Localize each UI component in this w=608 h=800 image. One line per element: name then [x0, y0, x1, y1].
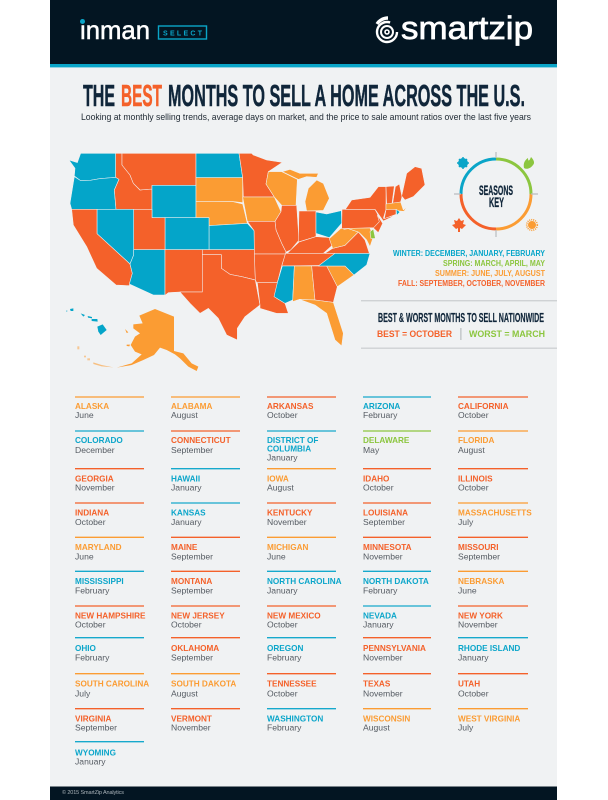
key heading [479, 182, 513, 210]
state: Virginia: September [75, 722, 117, 732]
state: Vermont: VERMONT [171, 714, 212, 723]
state: West Virginia: July [458, 722, 474, 732]
state: New Hampshire: October [75, 620, 106, 630]
season ring [454, 152, 538, 237]
state: Hawaii: HAWAII [171, 474, 200, 483]
state: West Virginia [458, 709, 528, 732]
best and worst months panel [361, 300, 557, 349]
state: Arizona [363, 397, 431, 420]
seasons key: SEASONS [479, 182, 513, 198]
state: Maine: September [171, 552, 213, 562]
state: New York [458, 606, 528, 630]
state: North Dakota: NORTH DAKOTA [363, 577, 429, 586]
state: Pennsylvania: November [363, 652, 403, 662]
state: Maryland [75, 537, 144, 562]
state: Vermont: November [171, 722, 211, 732]
state: Wisconsin: August [363, 722, 390, 732]
state: Oklahoma: OKLAHOMA [171, 644, 219, 653]
state: Florida: August [458, 445, 485, 455]
state: Wisconsin: WISCONSIN [363, 714, 410, 723]
state list [75, 397, 532, 767]
state: Arkansas: October [267, 410, 298, 420]
header band [50, 0, 557, 67]
state: Oregon: February [267, 652, 302, 662]
state: Florida: FLORIDA [458, 436, 494, 445]
state: Michigan [267, 537, 336, 562]
map of the United States [69, 153, 425, 346]
state: Connecticut [171, 431, 240, 455]
state: Kansas [171, 503, 240, 527]
state: Iowa: IOWA [267, 474, 289, 483]
state: Arizona: ARIZONA [363, 402, 400, 411]
season month lists: WINTER: DECEMBER, JANUARY, FEBRUARY [393, 249, 546, 258]
state: North Carolina: January [267, 586, 298, 596]
state: Pennsylvania [363, 638, 431, 662]
state: California [458, 397, 528, 420]
state: Ohio [75, 638, 144, 662]
state: Ohio: OHIO [75, 644, 97, 653]
state: New Jersey: October [171, 620, 202, 630]
season month lists [393, 249, 546, 288]
season month lists: FALL: SEPTEMBER, OCTOBER, NOVEMBER [398, 279, 545, 288]
best and worst months panel: BEST = OCTOBER [377, 329, 452, 340]
state: Georgia: November [75, 483, 115, 493]
season month lists: SUMMER: JUNE, JULY, AUGUST [435, 269, 545, 278]
state: Alaska [75, 397, 144, 420]
state: South Carolina: SOUTH CAROLINA [75, 680, 149, 689]
state: Utah: October [458, 688, 489, 698]
state: Hawaii: January [171, 483, 202, 493]
state: Idaho: IDAHO [363, 474, 390, 483]
state: Idaho: October [363, 483, 394, 493]
state: Nevada [363, 606, 431, 630]
state: Massachusetts: July [458, 517, 474, 527]
state: South Carolina: July [75, 688, 91, 698]
best and worst months panel: WORST = MARCH [469, 329, 545, 340]
state: North Carolina: NORTH CAROLINA [267, 577, 342, 586]
seasons key [452, 152, 538, 237]
state: Florida [458, 431, 528, 455]
state: New Jersey [171, 606, 240, 630]
state: West Virginia: WEST VIRGINIA [458, 714, 520, 723]
footer: © 2015 SmartZip Analytics [62, 789, 124, 796]
state: Michigan: June [267, 552, 286, 562]
season month lists: SPRING: MARCH, APRIL, MAY [443, 259, 546, 268]
state: Illinois: ILLINOIS [458, 474, 493, 483]
state: Arkansas [267, 397, 336, 420]
state: Maine [171, 537, 240, 562]
state: Indiana [75, 503, 144, 527]
state: Indiana: October [75, 517, 106, 527]
state: Rhode Island: January [458, 652, 489, 662]
state: Wyoming: WYOMING [75, 749, 116, 758]
state: California: CALIFORNIA [458, 402, 509, 411]
state: Washington: WASHINGTON [267, 714, 323, 723]
state: Virginia [75, 709, 144, 732]
state: Louisiana: LOUISIANA [363, 508, 408, 517]
state: Oklahoma: September [171, 652, 213, 662]
logo: inman select: inman [80, 15, 150, 45]
state: Montana: MONTANA [171, 577, 212, 586]
state: Delaware: DELAWARE [363, 436, 410, 445]
state: Tennessee: October [267, 688, 298, 698]
state: Missouri: September [458, 552, 500, 562]
state: Kentucky: KENTUCKY [267, 508, 313, 517]
state: Rhode Island [458, 638, 528, 662]
state: Maryland: June [75, 552, 94, 562]
key heading: KEY [489, 194, 504, 210]
state: Texas: November [363, 688, 403, 698]
state: Georgia [75, 469, 144, 493]
logo: inman select [80, 15, 206, 45]
state: Missouri: MISSOURI [458, 543, 498, 552]
icon: snowflake [457, 157, 469, 169]
state: Washington: February [267, 722, 302, 732]
state: Illinois: October [458, 483, 489, 493]
state: Utah [458, 674, 528, 698]
state: Connecticut: CONNECTICUT [171, 436, 231, 445]
icon: spring leaf [524, 157, 534, 169]
state: Massachusetts: MASSACHUSETTS [458, 508, 532, 517]
icon: sun [527, 220, 537, 230]
state: South Dakota [171, 674, 240, 698]
state: Illinois [458, 469, 528, 493]
title [83, 78, 525, 113]
state: New Mexico: October [267, 620, 298, 630]
state: District of Columbia: COLUMBIA [267, 445, 311, 454]
state: Kentucky: November [267, 517, 307, 527]
logo: inman select: SELECT [163, 30, 203, 37]
state: Tennessee [267, 674, 336, 698]
state: Idaho [363, 469, 431, 493]
state: Tennessee: TENNESSEE [267, 680, 317, 689]
state: Hawaii [171, 469, 240, 493]
state: Colorado: COLORADO [75, 436, 123, 445]
map inset: Alaska and Hawaii [66, 308, 198, 371]
state: Mississippi: February [75, 586, 110, 596]
title: THE [83, 78, 115, 113]
state: New Mexico [267, 606, 336, 630]
state: Alaska: ALASKA [75, 402, 109, 411]
state: Minnesota: MINNESOTA [363, 543, 412, 552]
state: Alabama: August [171, 410, 198, 420]
state: California: October [458, 410, 489, 420]
state: Arizona: February [363, 410, 398, 420]
state: Massachusetts [458, 503, 532, 527]
state: Missouri [458, 537, 528, 562]
state: District of Columbia [267, 431, 336, 462]
state: Colorado [75, 431, 144, 455]
state: Delaware: May [363, 445, 380, 455]
state: Nevada: NEVADA [363, 611, 397, 620]
state: North Carolina [267, 571, 342, 596]
state: South Dakota: August [171, 688, 198, 698]
state: New Jersey: NEW JERSEY [171, 611, 225, 620]
state: North Dakota: February [363, 586, 398, 596]
state: New Mexico: NEW MEXICO [267, 611, 321, 620]
state: Michigan: MICHIGAN [267, 543, 308, 552]
state: Ohio: February [75, 652, 110, 662]
state: Mississippi [75, 571, 144, 596]
state: District of Columbia: January [267, 452, 298, 462]
state: Montana: September [171, 586, 213, 596]
state: Oklahoma [171, 638, 240, 662]
state: Texas: TEXAS [363, 680, 391, 689]
state: Iowa [267, 469, 336, 493]
state: Texas [363, 674, 431, 698]
title: BEST [121, 78, 162, 113]
state: New Hampshire [75, 606, 146, 630]
state: Georgia: GEORGIA [75, 474, 114, 483]
state: Minnesota [363, 537, 431, 562]
state: Alaska: June [75, 410, 94, 420]
state: New York: November [458, 620, 498, 630]
state: Nebraska: NEBRASKA [458, 577, 504, 586]
state: New York: NEW YORK [458, 611, 503, 620]
state: New Hampshire: NEW HAMPSHIRE [75, 611, 146, 620]
state: Wyoming [75, 742, 144, 767]
state: Oregon: OREGON [267, 644, 303, 653]
state: Virginia: VIRGINIA [75, 714, 111, 723]
state: District of Columbia: DISTRICT OF [267, 436, 318, 445]
icon: maple leaf [452, 218, 466, 232]
state: Wyoming: January [75, 757, 106, 767]
state: Montana [171, 571, 240, 596]
state: Nebraska: June [458, 586, 477, 596]
state: Kansas: KANSAS [171, 508, 206, 517]
state: Colorado: December [75, 445, 115, 455]
state: Mississippi: MISSISSIPPI [75, 577, 124, 586]
logo: smartzip: smartzip [401, 10, 533, 46]
state: Connecticut: September [171, 445, 213, 455]
state: Utah: UTAH [458, 680, 480, 689]
state: Maryland: MARYLAND [75, 543, 122, 552]
state: Iowa: August [267, 483, 294, 493]
state: Maine: MAINE [171, 543, 198, 552]
state: South Dakota: SOUTH DAKOTA [171, 680, 236, 689]
state: Alabama: ALABAMA [171, 402, 212, 411]
state: Nebraska [458, 571, 528, 596]
state: Wisconsin [363, 709, 431, 732]
state: Kansas: January [171, 517, 202, 527]
state: Washington [267, 709, 336, 732]
state: Alabama [171, 397, 240, 420]
state: Indiana: INDIANA [75, 508, 109, 517]
state: South Carolina [75, 674, 149, 698]
state: Nevada: January [363, 620, 394, 630]
state: Louisiana: September [363, 517, 405, 527]
state: Louisiana [363, 503, 431, 527]
state: Pennsylvania: PENNSYLVANIA [363, 644, 426, 653]
state: Arkansas: ARKANSAS [267, 402, 314, 411]
footer [50, 786, 557, 800]
subtitle: Looking at monthly selling trends, average days on market, and the price to sale amount ratios over the last five years [81, 111, 531, 122]
state: North Dakota [363, 571, 431, 596]
state: Kentucky [267, 503, 336, 527]
state: Vermont [171, 709, 240, 732]
state: Minnesota: November [363, 552, 403, 562]
state: Oregon [267, 638, 336, 662]
state: Rhode Island: RHODE ISLAND [458, 644, 520, 653]
state: Delaware [363, 431, 431, 455]
